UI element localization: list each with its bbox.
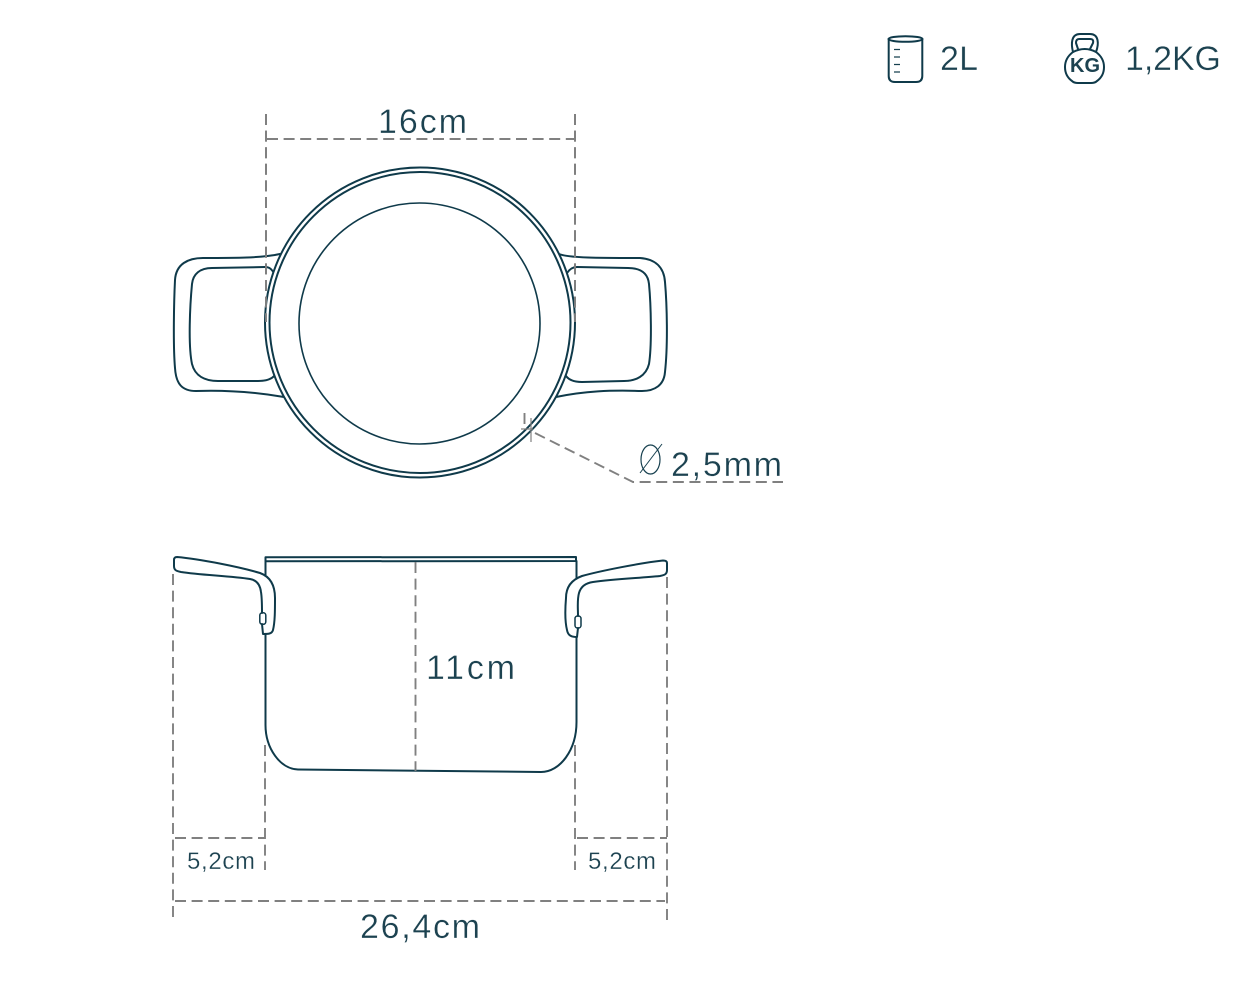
side view of pot: [174, 557, 667, 772]
left rivet: [260, 613, 266, 624]
overall width dimension: 26,4cm: 26,4cm: [360, 908, 480, 946]
right handle: [556, 254, 667, 397]
left handle dimension: 5,2cm: 5,2cm: [187, 848, 255, 875]
right handle: [565, 560, 667, 637]
capacity label: 2L: [940, 40, 978, 78]
width dimension: 16cm: 16cm: [378, 103, 467, 141]
icon: kettlebell: [1065, 34, 1104, 83]
rim: [266, 557, 576, 561]
weight label: 1,2KG: [1125, 40, 1221, 78]
right handle dimension: 5,2cm: 5,2cm: [588, 848, 656, 875]
height dimension: 11cm: 11cm: [426, 649, 515, 687]
icon: measuring beaker: [888, 36, 922, 82]
pot rim and base circles: [265, 168, 575, 478]
right handle dimension: 5,2cm: [575, 745, 667, 875]
thickness callout: 2,5mm: [521, 413, 783, 484]
right rivet: [575, 616, 581, 628]
top view of pot: [174, 168, 667, 478]
left handle: [174, 254, 284, 397]
left handle: [174, 557, 275, 634]
left handle dimension: 5,2cm: [175, 745, 265, 875]
body: [266, 561, 576, 772]
icon: kettlebell: KG: [1070, 55, 1100, 77]
thickness callout: 2,5mm: 2,5mm: [671, 446, 782, 484]
